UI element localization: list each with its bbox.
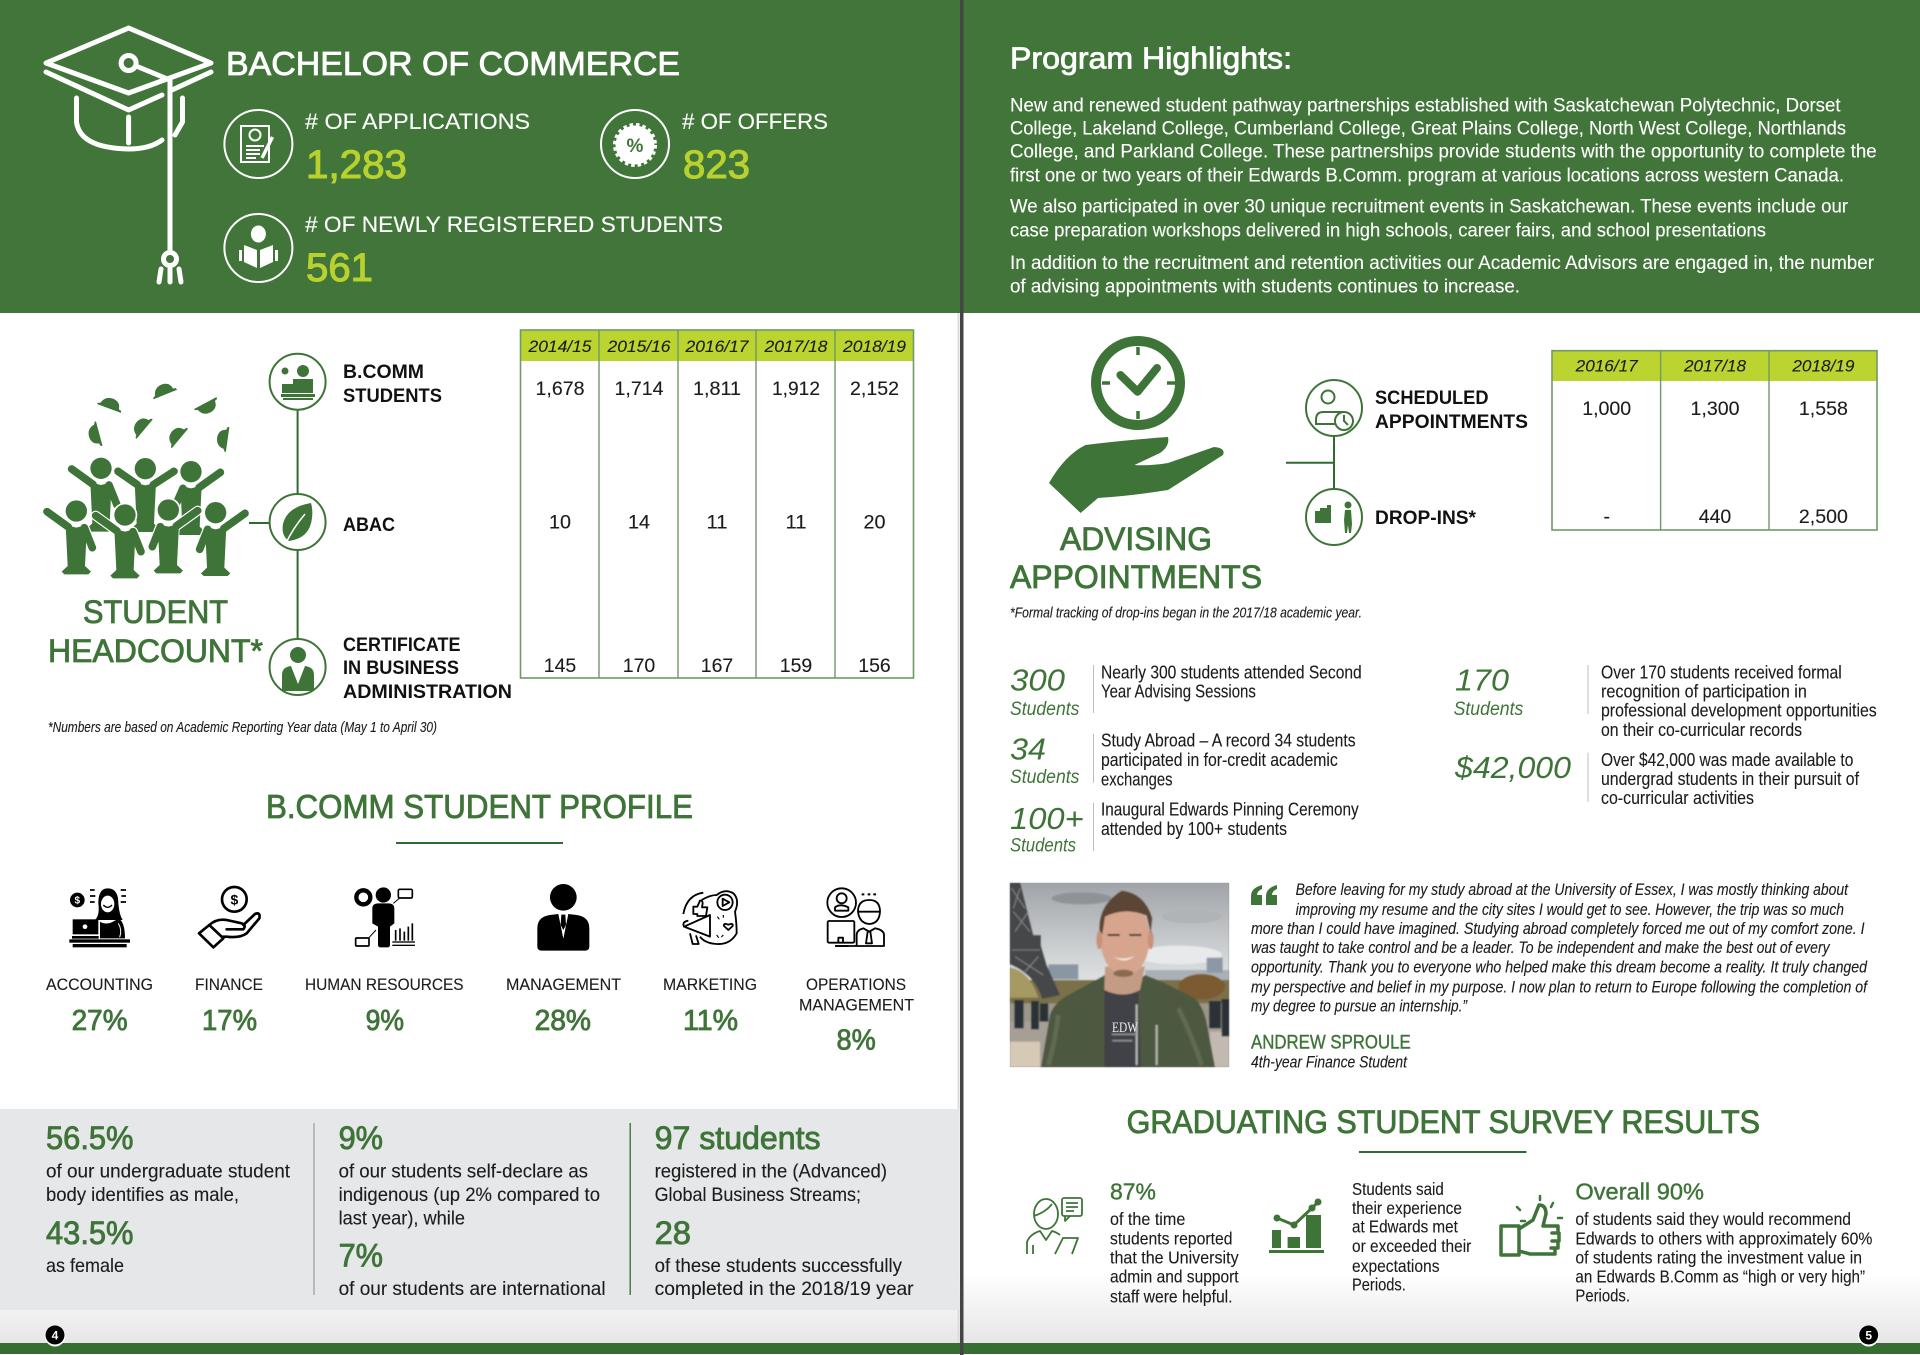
table: advising appointments: 2018/19	[1791, 357, 1855, 376]
stat: 170 students: on their co-curricular records	[1601, 720, 1802, 740]
label: operations management: MANAGEMENT	[799, 996, 914, 1014]
page number: 5	[1858, 1326, 1879, 1346]
label: management: MANAGEMENT	[506, 975, 621, 994]
label: b.comm students: B.COMM	[343, 362, 424, 383]
text block: pathway partnerships	[1010, 96, 1877, 187]
icon: leaf	[270, 494, 326, 550]
heading: student headcount: STUDENT	[83, 594, 228, 630]
heading: student headcount: HEADCOUNT*	[48, 633, 263, 669]
table: student headcount: 2018/19	[842, 337, 907, 356]
text block: advising appointments increase: In addition to the recruitment and retention activities our Academic Advisors are engaged in, the number	[1010, 253, 1875, 274]
heading: advising appointments	[1010, 521, 1262, 595]
icon: students throwing caps	[47, 380, 245, 578]
text block: overall 90% recommend	[1575, 1178, 1872, 1306]
text block: pathway partnerships: College, Lakeland College, Cumberland College, Great Plains College, North West College, Northlands	[1010, 119, 1846, 140]
value: human resources: 9%	[366, 1005, 404, 1037]
stat: 170 students: recognition of participation in	[1601, 682, 1807, 702]
label: accounting: ACCOUNTING	[46, 975, 153, 994]
table: student headcount: 10	[549, 512, 571, 534]
stat: gender: of our undergraduate student	[46, 1160, 291, 1182]
label: certificate in business administration: ADMINISTRATION	[343, 682, 512, 703]
icon: clock in hand	[1049, 341, 1224, 513]
icon: marketing	[683, 891, 737, 944]
label: b.comm students	[343, 362, 442, 407]
icon: percent badge: %	[627, 136, 644, 157]
table: advising appointments: -	[1603, 506, 1610, 528]
panel: student testimonial	[1010, 881, 1869, 1071]
number: applications: 1,283	[306, 143, 407, 187]
text block: 87% helpful staff: students reported	[1110, 1228, 1232, 1248]
text block: 87% helpful staff: admin and support	[1110, 1267, 1239, 1287]
label: scheduled appointments: SCHEDULED	[1375, 388, 1488, 409]
text block: pathway partnerships: first one or two years of their Edwards B.Comm. program at various locations across western Canada.	[1010, 166, 1844, 187]
panel: demographic stats	[0, 1109, 959, 1310]
heading: b.comm student profile: B.COMM STUDENT PROFILE	[266, 788, 693, 825]
heading: bachelor of commerce: BACHELOR OF COMMERCE	[226, 45, 680, 82]
heading: advising appointments: APPOINTMENTS	[1010, 559, 1262, 595]
text block: pathway partnerships: New and renewed student pathway partnerships established with Saskatchewan Polytechnic, Dorset	[1010, 96, 1841, 117]
icon: b.comm students	[270, 354, 326, 410]
icon: graduation cap	[46, 28, 211, 282]
footnote: drop-ins tracking: *Formal tracking of drop-ins began in the 2017/18 academic year.	[1010, 606, 1362, 622]
stat: global business streams: 28	[655, 1215, 691, 1251]
label: scheduled appointments: APPOINTMENTS	[1375, 412, 1528, 433]
stat: 300 students: Nearly 300 students attended Second	[1101, 662, 1362, 682]
stat: offers	[601, 109, 828, 187]
page number: 5: 5	[1865, 1328, 1872, 1342]
photo: andrew sproule in paris: EDW	[1112, 1020, 1139, 1036]
text block: testimonial quote: my degree to pursue an internship.”	[1251, 998, 1468, 1016]
table: student headcount: 1,912	[772, 378, 820, 400]
stat: 34 students: Study Abroad – A record 34 students	[1101, 731, 1356, 751]
heading: graduating student survey results: GRADUATING STUDENT SURVEY RESULTS	[1127, 1104, 1760, 1140]
text block: recruitment events	[1010, 197, 1849, 242]
text block: overall 90% recommend: an Edwards B.Comm as “high or very high”	[1575, 1267, 1865, 1287]
table: student headcount: 1,678	[536, 378, 584, 400]
panel: co-curricular stats	[1010, 662, 1877, 857]
table: student headcount: 11	[786, 512, 806, 534]
name: andrew sproule: ANDREW SPROULE	[1251, 1031, 1411, 1053]
panel: b.comm student profile	[46, 788, 914, 1057]
table: student headcount: 156	[858, 655, 891, 677]
stat: applications	[224, 109, 530, 187]
text block: overall 90% recommend: Overall 90%	[1575, 1178, 1704, 1204]
stat: global business streams: registered in the (Advanced)	[655, 1160, 887, 1182]
table: student headcount: 2,152	[850, 378, 899, 400]
stat: $42,000: Over $42,000 was made available to	[1601, 750, 1853, 770]
text block: recruitment events: We also participated in over 30 unique recruitment events in Saskatchewan. These events include our	[1010, 197, 1849, 218]
text block: recruitment events: case preparation workshops delivered in high schools, career fairs, and school presentations	[1010, 221, 1766, 242]
label: human resources: HUMAN RESOURCES	[305, 975, 464, 994]
stat: 300 students	[1010, 662, 1362, 720]
stat: 100+ students: 100+	[1010, 801, 1084, 836]
stat: gender	[46, 1120, 291, 1277]
table: student headcount: 145	[544, 655, 576, 677]
icon: scheduled appointments	[1306, 380, 1362, 436]
icon: accounting	[69, 888, 130, 947]
text block: advising appointments increase	[1010, 253, 1875, 297]
text block: experience met expectations: Students said	[1352, 1179, 1444, 1199]
stat: $42,000: $42,000	[1454, 750, 1571, 785]
text block: 87% helpful staff: that the University	[1110, 1247, 1239, 1267]
text block: experience met expectations: their experience	[1352, 1198, 1462, 1218]
label: newly registered students: # OF NEWLY REGISTERED STUDENTS	[305, 212, 723, 237]
label: offers: # OF OFFERS	[682, 109, 828, 134]
icon: thumbs up	[1501, 1196, 1562, 1255]
text block: testimonial quote	[1251, 881, 1869, 1016]
number: offers: 823	[683, 143, 750, 187]
icon: quotation mark	[1251, 885, 1277, 905]
stat: global business streams: 97 students	[655, 1120, 821, 1156]
table: advising appointments: 440	[1699, 506, 1731, 528]
label: abac: ABAC	[343, 515, 395, 536]
stat: global business streams: completed in the 2018/19 year	[655, 1278, 914, 1300]
stat: 34 students: exchanges	[1101, 770, 1172, 790]
stat: indigenous and international: 7%	[339, 1238, 383, 1274]
table: student headcount: 11	[706, 512, 728, 534]
icon: business person	[270, 639, 326, 695]
value: marketing: 11%	[683, 1005, 738, 1037]
stat: gender: body identifies as male,	[46, 1184, 239, 1206]
text block: overall 90% recommend: of students rating the investment value in	[1575, 1247, 1862, 1267]
table: student headcount: 170	[623, 655, 655, 677]
text block: overall 90% recommend: Edwards to others with approximately 60%	[1575, 1228, 1872, 1248]
stat: $42,000	[1454, 750, 1860, 808]
stat: gender: as female	[46, 1255, 124, 1277]
text block: 87% helpful staff: 87%	[1110, 1178, 1156, 1204]
icon: management	[537, 884, 589, 951]
stat: 300 students: 300	[1010, 663, 1065, 698]
label: certificate in business administration: CERTIFICATE	[343, 635, 460, 656]
text block: overall 90% recommend: Periods.	[1575, 1286, 1630, 1306]
footnote: academic reporting year: *Numbers are based on Academic Reporting Year data (May 1 to April 30)	[48, 720, 437, 736]
text block: experience met expectations: expectations	[1352, 1256, 1440, 1276]
stat: 100+ students	[1010, 800, 1359, 857]
stat: 170 students: 170	[1455, 663, 1509, 698]
stat: indigenous and international	[339, 1120, 606, 1300]
label: marketing: MARKETING	[663, 975, 757, 994]
stat: 34 students: 34	[1010, 731, 1046, 766]
stat: global business streams: Global Business Streams;	[655, 1184, 861, 1206]
page number: 4: 4	[52, 1328, 59, 1342]
label: finance: FINANCE	[195, 975, 263, 994]
stat: indigenous and international: last year), while	[339, 1208, 465, 1230]
photo: andrew sproule in paris	[1010, 883, 1229, 1067]
value: management: 28%	[535, 1005, 591, 1037]
text block: experience met expectations: Periods.	[1352, 1275, 1406, 1295]
connector lines	[1286, 436, 1334, 489]
table: student headcount: 20	[864, 512, 886, 534]
table: advising appointments	[1552, 351, 1877, 530]
table: student headcount: 159	[780, 655, 812, 677]
table: student headcount: 2016/17	[684, 337, 749, 356]
stat: 170 students	[1454, 662, 1877, 740]
connector lines	[249, 410, 298, 639]
table: student headcount: 1,811	[693, 378, 741, 400]
text block: overall 90% recommend: of students said they would recommend	[1575, 1209, 1851, 1229]
icon: human resources	[356, 887, 415, 947]
stat: indigenous and international: of our students self-declare as	[339, 1160, 588, 1182]
stat: indigenous and international: indigenous (up 2% compared to	[339, 1184, 600, 1206]
panel: advising appointments	[1010, 341, 1877, 622]
table: advising appointments: 2,500	[1799, 506, 1848, 528]
table: student headcount: 2015/16	[606, 337, 671, 356]
page number: 4	[44, 1326, 66, 1346]
table: advising appointments: 1,300	[1690, 398, 1740, 420]
stat: global business streams: of these students successfully	[655, 1255, 902, 1277]
table: student headcount: 2017/18	[763, 337, 828, 356]
label: operations management	[799, 975, 914, 1014]
table: student headcount: 1,714	[614, 378, 664, 400]
number: newly registered students: 561	[306, 246, 373, 290]
stat: $42,000: co-curricular activities	[1601, 788, 1754, 808]
text block: advising appointments increase: of advising appointments with students continues to increase.	[1010, 276, 1520, 297]
icon: drop-ins	[1306, 489, 1362, 545]
stat: 34 students	[1010, 731, 1356, 790]
stat: 300 students: Year Advising Sessions	[1101, 681, 1256, 701]
stat: gender: 43.5%	[46, 1215, 134, 1251]
panel: graduating student survey results	[1027, 1104, 1872, 1307]
stat: 34 students: participated in for-credit academic	[1101, 750, 1338, 770]
value: operations management: 8%	[836, 1025, 876, 1057]
label: applications: # OF APPLICATIONS	[305, 109, 530, 134]
table: advising appointments: 2016/17	[1575, 357, 1638, 376]
label: b.comm students: STUDENTS	[343, 386, 442, 407]
label: certificate in business administration: IN BUSINESS	[343, 658, 459, 679]
stat: global business streams	[655, 1120, 914, 1300]
stat: gender: 56.5%	[46, 1120, 134, 1156]
table: advising appointments: 2017/18	[1683, 357, 1747, 376]
label: scheduled appointments	[1375, 388, 1528, 433]
stat: 170 students: professional development opportunities	[1601, 701, 1877, 721]
text block: 87% helpful staff	[1110, 1178, 1239, 1307]
value: accounting: 27%	[72, 1005, 128, 1037]
text block: pathway partnerships: College, and Parkland College. These partnerships provide students with the opportunity to complete the	[1010, 142, 1877, 163]
text block: 87% helpful staff: staff were helpful.	[1110, 1287, 1232, 1307]
table: advising appointments: 1,558	[1799, 398, 1848, 420]
text block: testimonial quote: was taught to take control and be a leader. To be independent and make the best out of every	[1251, 939, 1831, 957]
label: certificate in business administration	[343, 635, 512, 703]
stat: 170 students: Students	[1454, 698, 1524, 720]
icon: student reading	[239, 226, 278, 268]
panel: program highlights header	[960, 0, 1920, 313]
text block: experience met expectations: or exceeded their	[1352, 1236, 1471, 1256]
label: operations management: OPERATIONS	[806, 975, 906, 994]
icon: application form	[241, 126, 272, 162]
icon: operations management	[827, 888, 884, 946]
footer bar	[0, 1343, 1920, 1354]
icon: finance: $	[230, 891, 238, 907]
stat: $42,000: undergrad students in their pursuit of	[1601, 769, 1860, 789]
text block: experience met expectations: at Edwards met	[1352, 1217, 1458, 1237]
table: student headcount: 14	[628, 512, 650, 534]
icon: percent badge	[614, 124, 656, 166]
stat: 100+ students: Inaugural Edwards Pinning Ceremony	[1101, 800, 1359, 820]
stat: 300 students: Students	[1010, 698, 1080, 720]
heading: student headcount	[48, 594, 263, 669]
panel: bachelor of commerce header	[0, 0, 960, 313]
heading: program highlights: Program Highlights:	[1010, 40, 1292, 75]
stat: 170 students: Over 170 students received formal	[1601, 662, 1842, 682]
text block: experience met expectations	[1352, 1179, 1471, 1295]
table: student headcount: 2014/15	[527, 337, 592, 356]
table: student headcount	[520, 330, 914, 678]
icon: finance	[199, 887, 260, 947]
stat: indigenous and international: 9%	[339, 1120, 383, 1156]
stat: 100+ students: Students	[1010, 835, 1076, 857]
label: drop-ins: DROP-INS*	[1375, 508, 1477, 529]
stat: 100+ students: attended by 100+ students	[1101, 819, 1287, 839]
value: finance: 17%	[202, 1005, 257, 1037]
role: finance student: 4th-year Finance Student	[1251, 1053, 1408, 1071]
table: advising appointments: 1,000	[1582, 398, 1631, 420]
icon: accounting: $	[75, 896, 81, 907]
heading: advising appointments: ADVISING	[1060, 521, 1212, 557]
panel: student headcount	[47, 330, 914, 736]
table: student headcount: 167	[701, 655, 733, 677]
icon: rising bar chart	[1269, 1198, 1324, 1253]
stat: indigenous and international: of our students are international	[339, 1278, 606, 1300]
stat: 34 students: Students	[1010, 766, 1080, 788]
stat: newly registered students	[224, 212, 723, 290]
text block: 87% helpful staff: of the time	[1110, 1209, 1185, 1229]
icon: staff with speech bubble	[1027, 1198, 1082, 1254]
